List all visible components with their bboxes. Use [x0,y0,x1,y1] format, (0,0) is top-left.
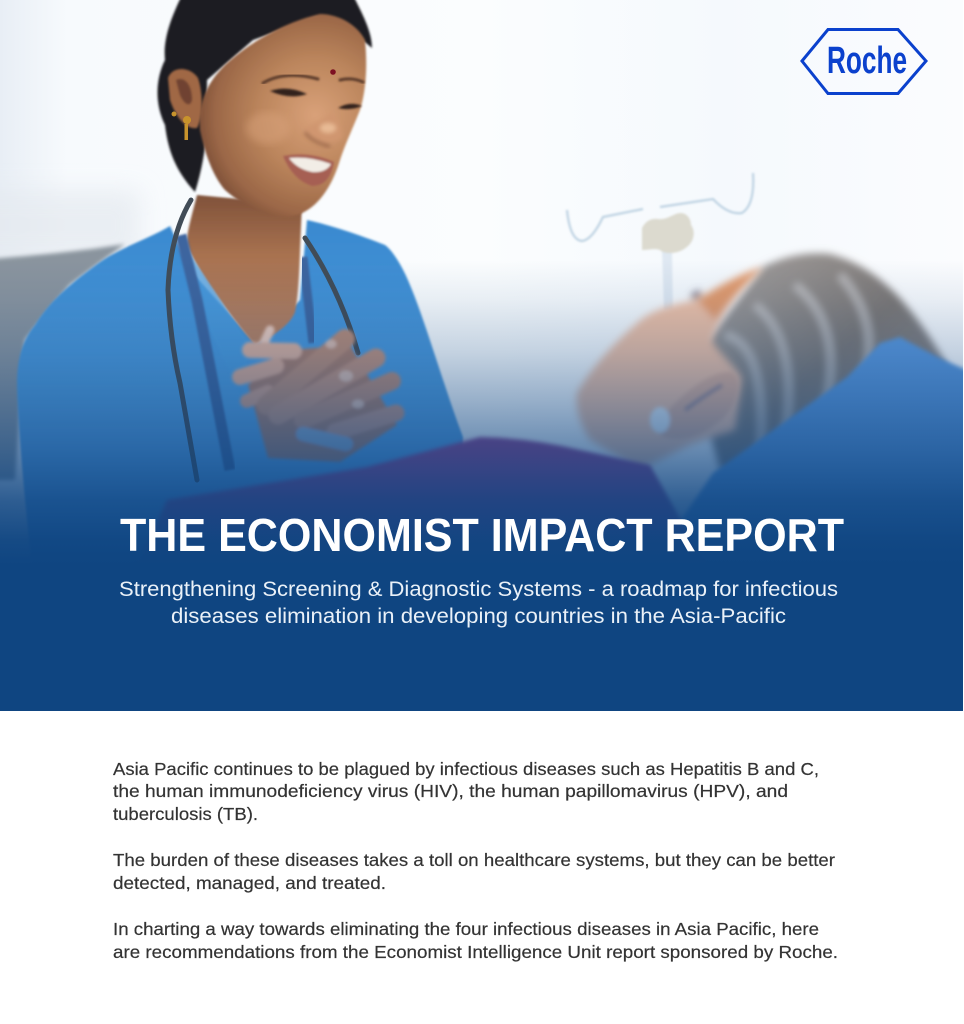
intro paragraph 2: detected, managed, and treated. [113,873,386,893]
intro paragraph 1 [113,759,819,824]
smile [283,154,334,186]
patient face [577,267,763,470]
intro paragraph 1: Asia Pacific continues to be plagued by infectious diseases such as Hepatitis B and C, [113,759,819,779]
neck [187,195,302,345]
solid blue footer band [0,565,963,711]
intro paragraph 2: The burden of these diseases takes a toll on healthcare systems, but they can be better [113,850,835,870]
Roche logo: Roche [827,40,907,82]
intro paragraph 2 [113,850,835,893]
patient hair [700,253,947,480]
intro paragraph 3: are recommendations from the Economist Intelligence Unit report sponsored by Roche. [113,942,838,962]
eyebrows [263,75,363,83]
hero photo panel [0,0,964,712]
lanyard [181,235,230,470]
subtitle: diseases elimination in developing countries in the Asia-Pacific [171,605,786,628]
hair [158,0,372,192]
subtitle: Strengthening Screening & Diagnostic Systems - a roadmap for infectious [119,578,838,601]
inner v-neck [190,254,238,325]
cheek highlight [246,114,285,144]
earrings [172,112,191,140]
intro paragraph 1: the human immunodeficiency virus (HIV), the human papillomavirus (HPV), and [113,781,788,801]
intro paragraph 3 [113,919,838,962]
hands [240,330,397,462]
eyes [270,89,362,109]
nose [304,122,338,148]
stethoscope [168,200,358,480]
title: THE ECONOMIST IMPACT REPORT [120,509,844,561]
IV hook stand [567,173,753,310]
pillow [683,335,963,534]
bindi [330,69,336,75]
ear [168,69,202,128]
intro paragraph 3: In charting a way towards eliminating the four infectious diseases in Asia Pacific, here [113,919,819,939]
subtitle [119,578,838,628]
patient [573,248,963,534]
intro paragraph 1: tuberculosis (TB). [113,804,258,824]
face [200,14,366,217]
Roche logo [802,30,926,94]
patient ear [648,373,736,434]
gray sofa [0,244,125,480]
scrubs [16,218,464,532]
purple blanket [160,434,680,536]
nurse [17,0,463,570]
blue gradient overlay [0,260,963,565]
